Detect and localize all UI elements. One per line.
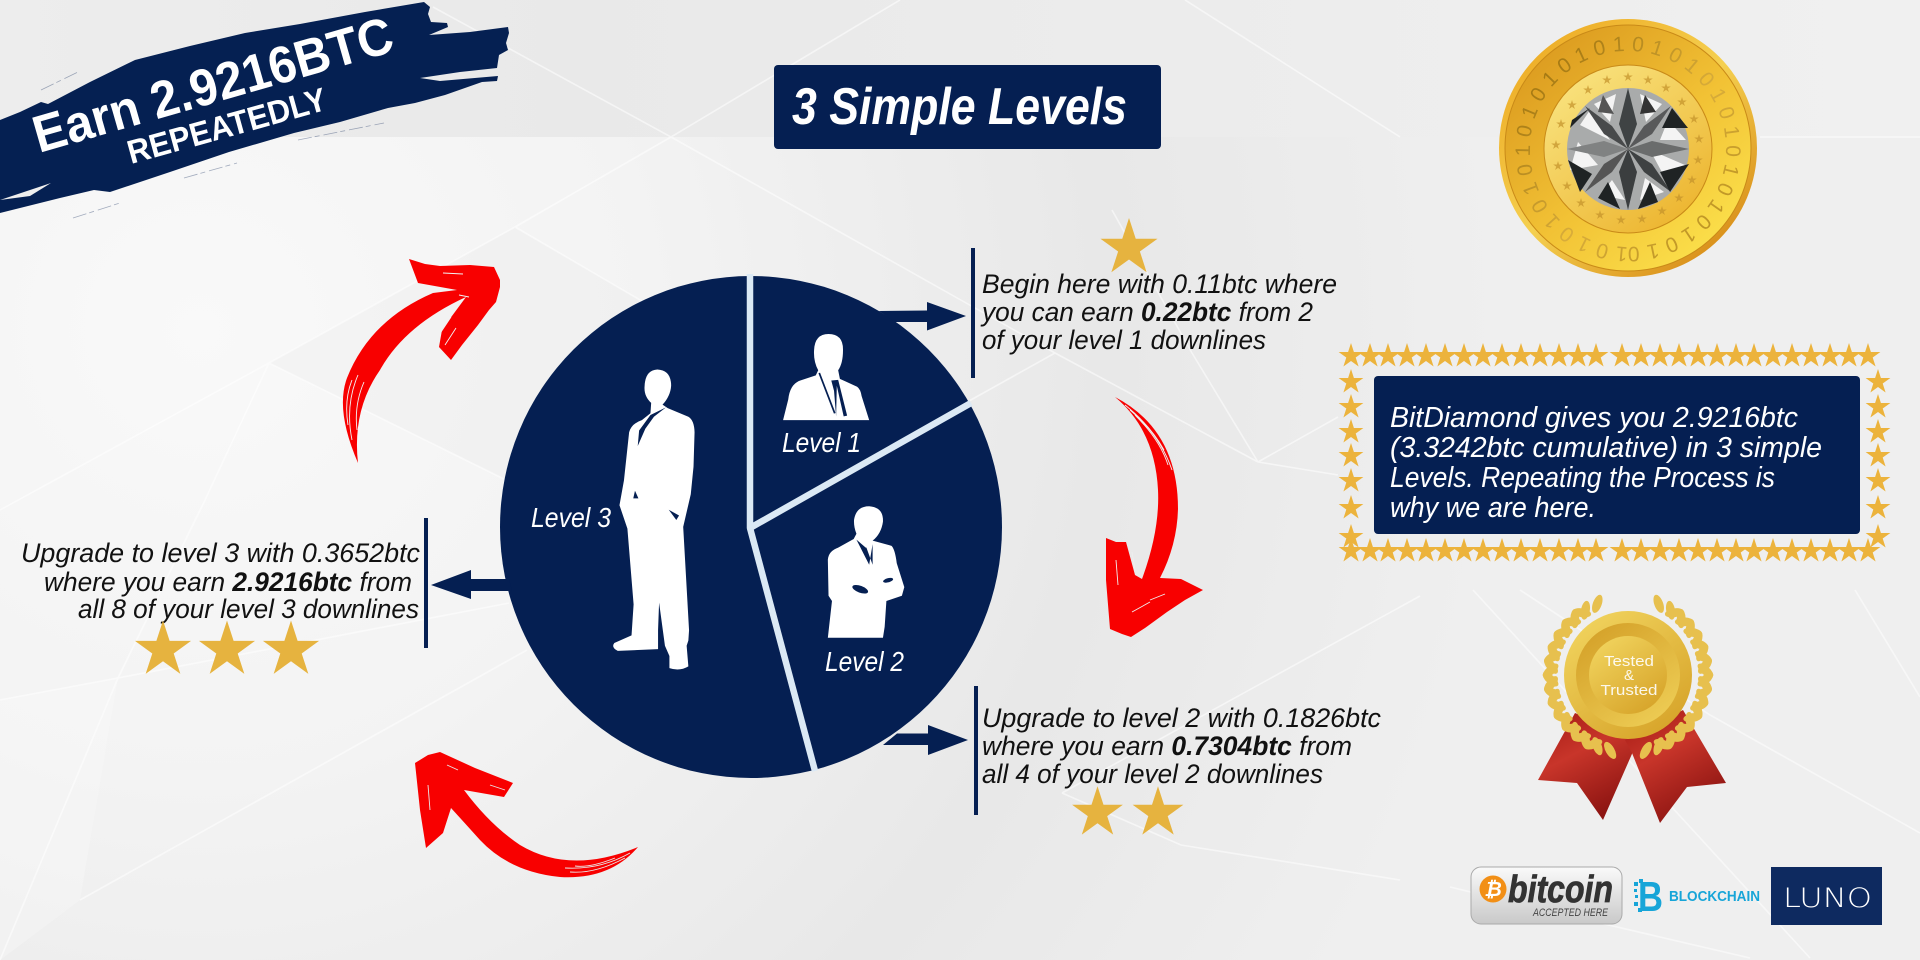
statement text: why we are here. [1390, 492, 1596, 524]
level 2 figure and label [825, 506, 904, 677]
binary ring text: 1010101010101010101010101010101010 [1516, 36, 1741, 262]
star frame [1339, 343, 1890, 562]
title box: 3 Simple Levels [774, 65, 1161, 149]
logo: bitcoin accepted here: ₿ [1484, 879, 1502, 901]
banner: Earn 2.9216BTC repeatedly: REPEATEDLY [123, 80, 330, 171]
red arrow: level 2 back to level 3 [415, 752, 638, 877]
red arrow: level 1 down to level 2 [1106, 397, 1203, 637]
star rating: one star [1100, 218, 1158, 272]
laurel wreath [1540, 591, 1716, 763]
callout: level 2: where you earn 0.7304btc from [982, 731, 1352, 761]
callout: level 2 [883, 686, 1381, 835]
callout: level 3: all 8 of your level 3 downlines [78, 594, 419, 624]
diamond [1567, 88, 1689, 210]
logo: luno [1771, 867, 1882, 925]
medal text: & [1624, 667, 1634, 684]
logo: blockchain: B [1638, 873, 1663, 920]
logo: bitcoin accepted here [1471, 867, 1622, 924]
logo: bitcoin accepted here: bitcoin [1508, 869, 1613, 911]
callout: level 1: of your level 1 downlines [982, 325, 1266, 355]
medal text: Trusted [1600, 682, 1658, 699]
arrow: pie to level 2 [883, 725, 968, 755]
ribbons [1538, 710, 1726, 823]
callout: level 3: Upgrade to level 3 with 0.3652btc [21, 538, 420, 568]
star rating: two stars [1072, 786, 1183, 835]
arrow: pie to level 3 [431, 570, 512, 599]
statement text: Levels. Repeating the Process is [1390, 462, 1775, 494]
callout: level 1: Begin here with 0.11btc where [982, 269, 1337, 299]
statement text: (3.3242btc cumulative) in 3 simple [1390, 432, 1822, 464]
callout: level 2: Upgrade to level 2 with 0.1826btc [982, 703, 1381, 733]
level 1 figure and label: Level 1 [782, 427, 861, 458]
gold diamond coin [1499, 19, 1757, 277]
banner: Earn 2.9216BTC repeatedly: Earn 2.9216BTC [26, 6, 400, 165]
medal text [1600, 653, 1658, 699]
logo: bitcoin accepted here: ACCEPTED HERE [1532, 907, 1609, 919]
callout: level 2: all 4 of your level 2 downlines [982, 759, 1323, 789]
star rating: three stars [135, 620, 319, 674]
level 1 figure and label [782, 334, 869, 458]
arrow: pie to level 1 [879, 302, 966, 330]
callout: level 3 [21, 518, 512, 674]
callout: level 1 [879, 218, 1337, 378]
callout: level 1: you can earn 0.22btc from 2 [980, 297, 1313, 327]
star-framed statement panel [1339, 343, 1890, 562]
pie chart with three levels [500, 274, 1002, 778]
logo: luno: LUNO [1783, 883, 1872, 914]
level 3 figure and label [531, 370, 695, 669]
title box: 3 Simple Levels: 3 Simple Levels [792, 78, 1127, 136]
statement text [1390, 402, 1822, 524]
level 2 figure and label: Level 2 [825, 646, 904, 677]
medal text: Tested [1604, 653, 1654, 670]
statement text: BitDiamond gives you 2.9216btc [1390, 402, 1798, 434]
red arrow: level 3 up to level 1 [343, 259, 500, 463]
logo: blockchain: BLOCKCHAIN [1669, 889, 1760, 905]
callout: level 3: where you earn 2.9216btc from [44, 567, 412, 597]
medal: Tested and Trusted [1538, 591, 1726, 823]
logo: blockchain [1634, 873, 1760, 920]
banner: Earn 2.9216BTC repeatedly [0, 2, 509, 218]
level 3 figure and label: Level 3 [531, 502, 611, 533]
